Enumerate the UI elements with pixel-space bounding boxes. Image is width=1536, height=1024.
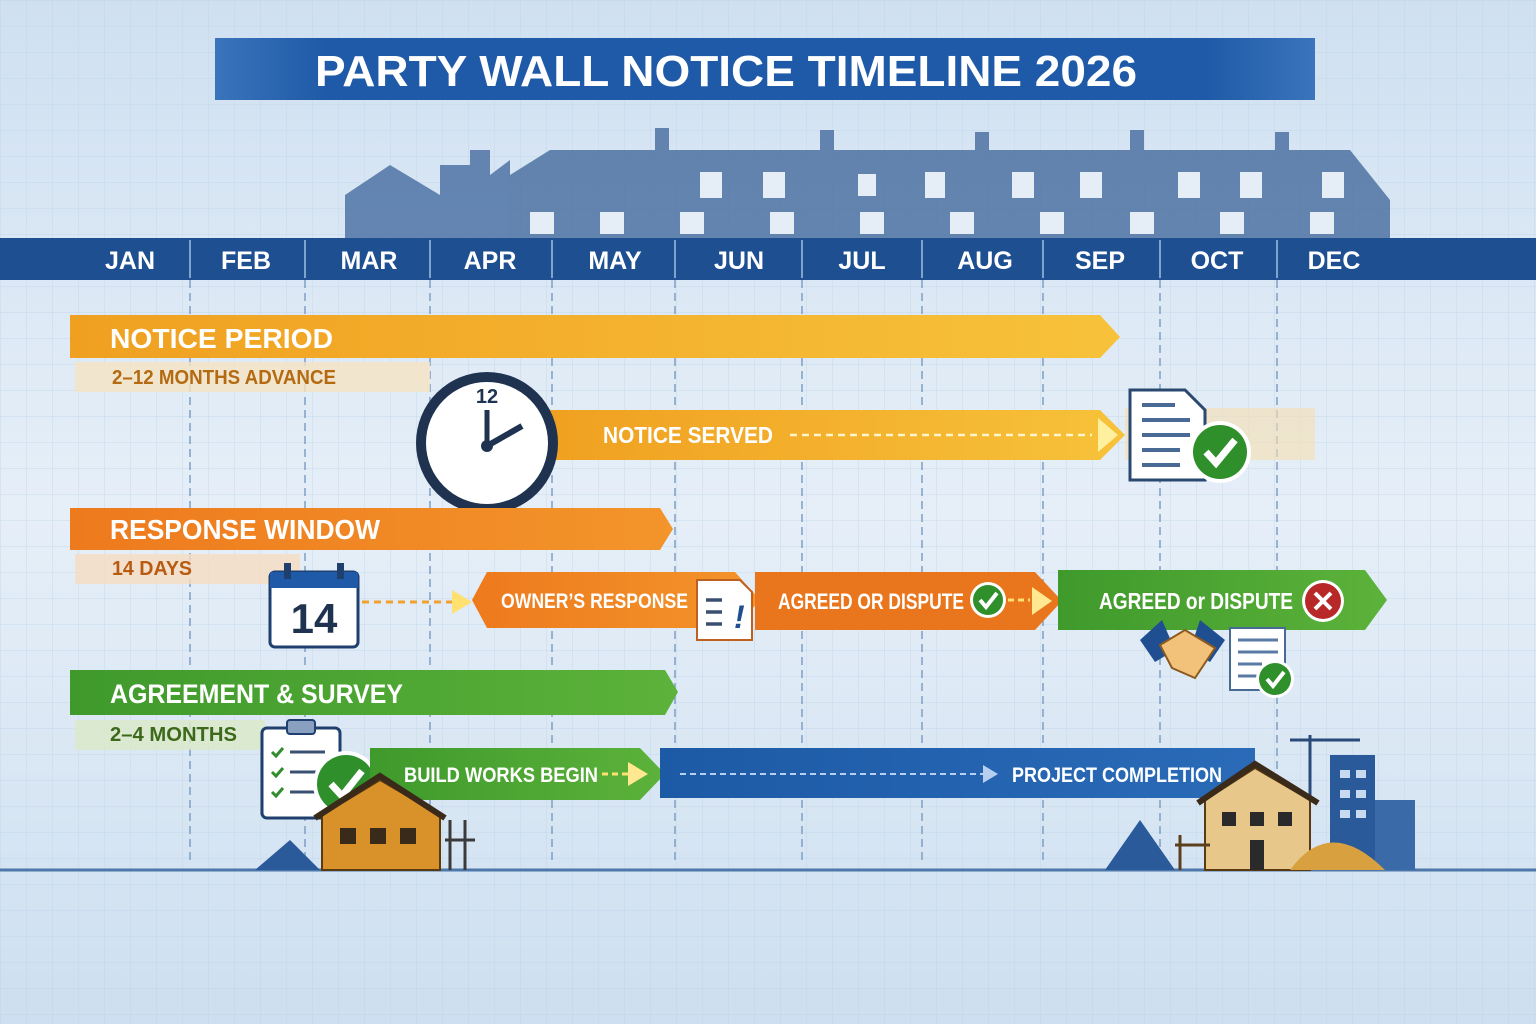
agreed or dispute bar (green) [1058,570,1387,630]
icon: completed house and buildings right [1105,735,1415,870]
month bar [0,238,1536,280]
icon: clipboard with check [262,720,379,818]
month bar: FEB [221,247,271,275]
agreed or dispute bar (green): AGREED or DISPUTE [1099,588,1293,614]
month bar: OCT [1191,247,1243,275]
notice served bar [545,408,1315,460]
icon: document with check [1130,390,1251,483]
build works begin bar [370,748,665,800]
notice period bar: NOTICE PERIOD [110,323,333,354]
month bar: JUL [838,247,886,275]
month bar: MAY [588,247,642,275]
response window bar: 14 DAYS [112,558,192,580]
month bar: DEC [1308,247,1360,275]
month bar: JUN [714,247,764,275]
icon: calendar 14 [270,563,358,647]
notice period bar [70,315,1120,392]
title banner [215,38,1315,100]
project completion bar [660,748,1255,798]
month bar: SEP [1075,247,1125,275]
owner's response bar [472,572,760,628]
icon: document alert [697,580,752,640]
build works begin bar: BUILD WORKS BEGIN [404,764,598,787]
agreement & survey bar [70,670,678,750]
skyline houses [345,128,1390,240]
icon: clock [416,372,558,514]
owner's response bar: OWNER’S RESPONSE [501,590,688,613]
icon: handshake and document [1140,620,1294,698]
arrow: calendar to owner's response [362,590,472,614]
icon: house under construction left [255,776,475,870]
response window bar: RESPONSE WINDOW [110,514,381,545]
notice served bar: NOTICE SERVED [603,422,773,448]
icon: document alert: ! [734,599,745,635]
notice period bar: 2–12 MONTHS ADVANCE [112,367,336,389]
agreed or dispute bar (orange) [755,572,1062,630]
agreement & survey bar: 2–4 MONTHS [110,724,237,746]
project completion bar: PROJECT COMPLETION [1012,764,1222,787]
month bar: AUG [957,247,1013,275]
month bar: JAN [105,247,155,275]
icon: calendar 14: 14 [291,595,338,642]
agreed or dispute bar (orange): AGREED OR DISPUTE [778,589,964,614]
icon: clock: 12 [476,386,498,408]
title banner: PARTY WALL NOTICE TIMELINE 2026 [315,47,1137,96]
month bar: APR [464,247,516,275]
agreement & survey bar: AGREEMENT & SURVEY [110,679,403,709]
response window bar [70,508,673,584]
month bar: MAR [341,247,397,275]
